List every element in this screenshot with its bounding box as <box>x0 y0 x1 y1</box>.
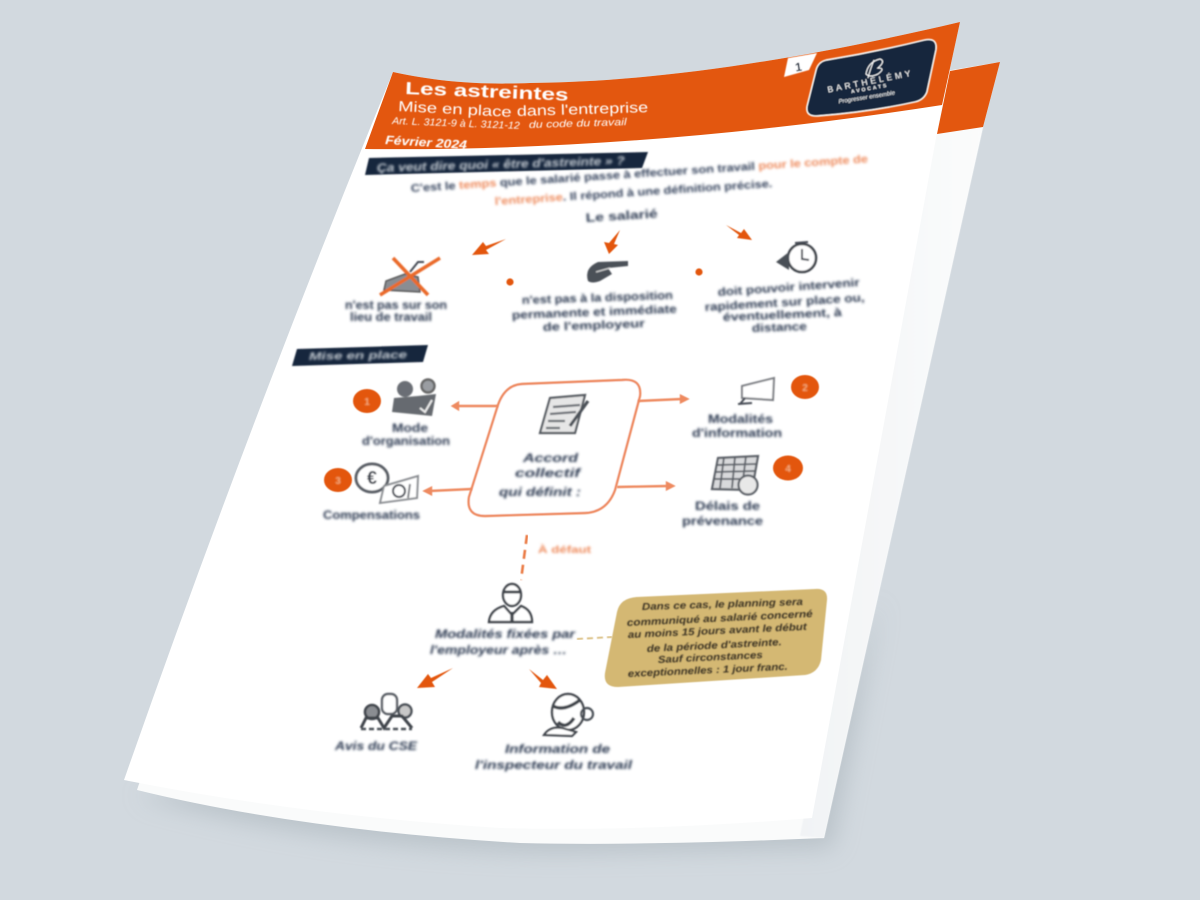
dashed connector <box>577 637 612 639</box>
accord text: Accord <box>522 453 579 465</box>
label: modalités fixées: Modalités fixées par <box>435 629 576 641</box>
label: disposition <box>512 290 677 334</box>
header band <box>365 22 960 149</box>
heading bar: mise en place: Mise en place <box>309 349 407 363</box>
label: disposition: n'est pas à la disposition <box>522 290 673 307</box>
label: modalités fixées <box>430 629 576 657</box>
dashed arrow <box>521 535 527 580</box>
label: intervenir: rapidement sur place ou, <box>704 292 865 314</box>
label: délais de prévenance: Délais de <box>695 501 760 513</box>
label: modalités d'information <box>692 414 782 440</box>
number badge 4: 4 <box>785 464 791 475</box>
label: lieu de travail: lieu de travail <box>350 312 432 324</box>
callout: exceptionnelles : 1 jour franc. <box>628 662 788 680</box>
label: avis du CSE: Avis du CSE <box>334 741 417 753</box>
accord text: qui définit : <box>499 487 581 499</box>
heading bar: definition: Ça veut dire quoi « être d'astreinte » ? <box>377 156 625 175</box>
label: délais de prévenance: prévenance <box>682 516 763 528</box>
accord box <box>469 380 640 516</box>
number badge 4 <box>773 456 803 480</box>
logo: BARTHÉLÉMY <box>827 68 914 95</box>
legal reference: Art. L. 3121-9 à L. 3121-12 <box>391 116 520 132</box>
icon: stopwatch <box>776 242 816 272</box>
label: lieu de travail <box>345 300 447 324</box>
label: inspecteur: Information de <box>505 744 611 756</box>
accord text: collectif <box>515 468 582 480</box>
label: modalités fixées: l'employeur après … <box>430 645 567 657</box>
page number tab: 1 <box>794 60 803 74</box>
icon: CSE group <box>361 694 412 729</box>
label: intervenir <box>704 277 865 335</box>
le salarié: Le salarié <box>585 209 658 225</box>
logo: Progresser ensemble <box>838 90 896 105</box>
page number tab <box>784 53 817 77</box>
number badge 2: 2 <box>802 383 808 394</box>
label: compensations: Compensations <box>323 510 420 522</box>
icon: workplace crossed out <box>380 258 440 295</box>
label: lieu de travail: n'est pas sur son <box>345 300 447 312</box>
heading bar: definition <box>365 152 648 175</box>
label: mode d'organisation: Mode <box>392 423 428 435</box>
label: modalités d'information: d'information <box>692 428 782 440</box>
subtitle <box>398 98 648 120</box>
label: délais de prévenance <box>682 501 763 528</box>
sheet shadow <box>137 600 880 852</box>
legal reference: du code du travail <box>529 117 627 131</box>
heading bar: mise en place <box>292 345 428 366</box>
label: intervenir: distance <box>752 321 807 335</box>
label: inspecteur: l'inspecteur du travail <box>475 760 633 772</box>
label: modalités d'information: Modalités <box>708 414 773 426</box>
label: intervenir: doit pouvoir intervenir <box>717 277 860 299</box>
icon: calendar <box>712 456 758 494</box>
icon: euro compensation: € <box>367 468 377 488</box>
number badge 1 <box>353 389 381 413</box>
icon: hand <box>587 261 628 282</box>
definition text: l'entreprise . Il répond à une définition précise. <box>494 178 773 208</box>
callout: de la période d'astreinte. <box>647 637 782 655</box>
callout: Dans ce cas, le planning sera <box>642 597 804 613</box>
number badge 1: 1 <box>364 397 370 408</box>
callout: Sauf circonstances <box>658 650 764 666</box>
definition text: C'est le temps que le salarié passe à effectuer son travail pour le compte de <box>410 153 868 195</box>
number badge 3 <box>324 468 352 492</box>
callout: communiqué au salarié concerné <box>627 609 813 629</box>
label: disposition: de l'employeur <box>543 318 646 334</box>
number badge 3: 3 <box>335 476 341 487</box>
icon: document <box>540 395 588 433</box>
icon: euro compensation <box>356 464 418 503</box>
logo <box>807 39 936 116</box>
icon: megaphone <box>738 378 774 404</box>
icon: employer <box>489 584 532 622</box>
accord text <box>499 453 582 499</box>
title: Les astreintes <box>405 78 569 105</box>
legal reference <box>391 116 627 132</box>
label: mode d'organisation <box>362 423 450 448</box>
number badge 2 <box>791 375 819 399</box>
à défaut: À défaut <box>538 543 592 556</box>
label: mode d'organisation: d'organisation <box>362 436 450 448</box>
callout: au moins 15 jours avant le début <box>628 622 808 641</box>
label: inspecteur <box>475 744 633 772</box>
label: disposition: permanente et immédiate <box>512 304 677 322</box>
subtitle: dans l'entreprise <box>517 100 648 120</box>
callout <box>605 589 827 687</box>
date: Février 2024 <box>385 133 467 152</box>
icon: inspector <box>544 694 593 736</box>
arrows to CSE and inspector <box>417 668 557 689</box>
back sheet <box>137 62 1000 844</box>
separator dots <box>506 268 703 286</box>
logo: AVOCATS <box>851 83 889 95</box>
arrows from salarié <box>472 225 752 255</box>
subtitle: Mise en place <box>398 98 512 120</box>
label: intervenir: éventuellement, à <box>723 307 843 324</box>
icon: organisation <box>392 380 436 416</box>
front sheet <box>124 22 960 829</box>
connector arrows <box>425 396 687 494</box>
